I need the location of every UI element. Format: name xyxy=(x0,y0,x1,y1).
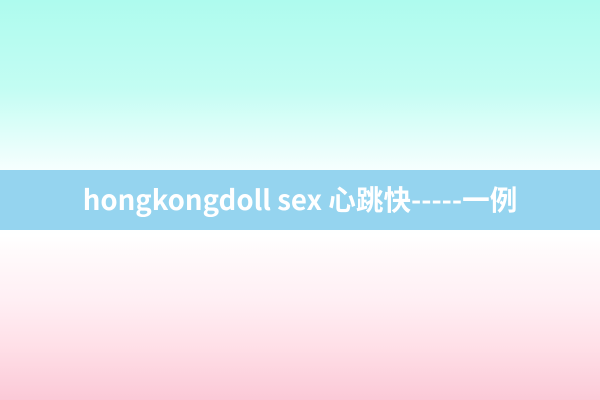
title: hongkongdoll sex 心跳快-----一例 xyxy=(83,178,517,218)
title band xyxy=(0,170,600,230)
